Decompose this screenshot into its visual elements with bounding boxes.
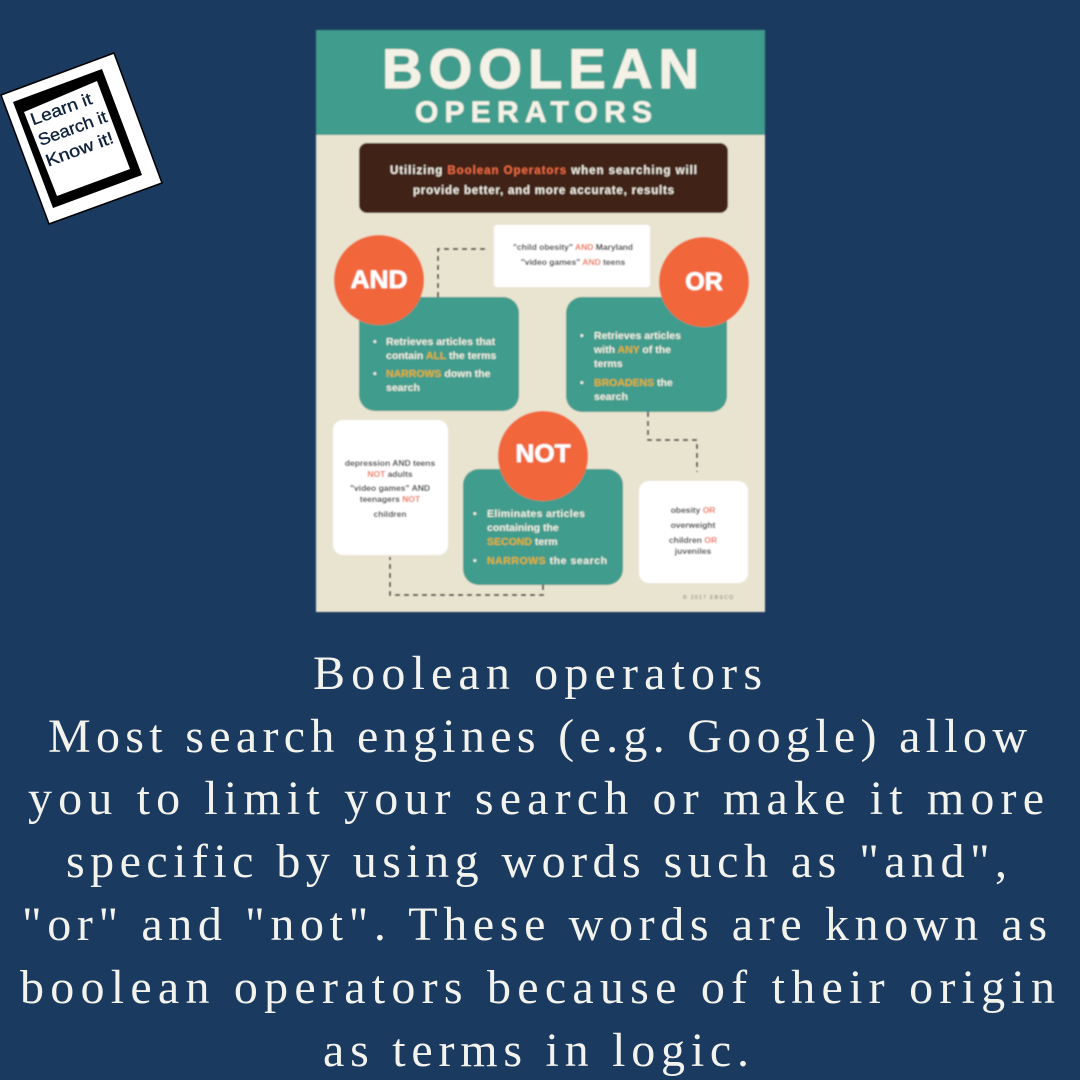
intro banner <box>359 143 728 213</box>
OR example box: juveniles <box>674 546 711 556</box>
body text <box>20 647 1055 1077</box>
copyright note: © 2017 EBSCO <box>683 594 733 601</box>
NOT panel: • <box>473 508 477 520</box>
body text: specific by using words such as "and", <box>66 835 1007 888</box>
poster header: BOOLEAN <box>382 37 699 100</box>
AND example box: "video games" AND teens <box>521 257 626 267</box>
connector: OR to example <box>648 412 697 472</box>
NOT example box: teenagers NOT <box>360 494 421 504</box>
AND panel: Retrieves articles that <box>386 336 496 348</box>
connector: AND to example <box>438 249 489 297</box>
AND panel: • <box>373 336 377 348</box>
AND badge <box>334 235 424 325</box>
OR panel <box>566 297 727 412</box>
NOT badge: NOT <box>516 440 570 468</box>
OR panel: BROADENS the <box>594 377 673 389</box>
AND example box: "child obesity" AND Maryland <box>513 242 633 252</box>
logo: Learn it, Search it, Know it <box>1 53 162 224</box>
OR panel: with ANY of the <box>593 344 671 356</box>
poster header: OPERATORS <box>415 96 652 129</box>
body text: Most search engines (e.g. Google) allow <box>48 710 1027 763</box>
OR badge: OR <box>685 268 723 296</box>
AND panel <box>359 297 519 411</box>
logo: Learn it, Search it, Know it: Learn it <box>28 89 95 129</box>
body text: boolean operators because of their origin <box>20 961 1055 1014</box>
AND panel: contain ALL the terms <box>386 350 496 362</box>
NOT panel <box>463 469 623 585</box>
poster header <box>316 30 765 135</box>
poster: Boolean operators <box>316 30 765 612</box>
AND example box <box>494 225 650 287</box>
OR example box: children OR <box>669 535 717 545</box>
AND panel: • <box>373 368 377 380</box>
NOT panel: NARROWS the search <box>487 555 607 567</box>
AND panel: search <box>386 382 420 394</box>
OR panel: terms <box>594 358 623 370</box>
logo: Learn it, Search it, Know it: Know it! <box>43 128 116 170</box>
NOT example box: NOT adults <box>367 469 413 479</box>
NOT example box: children <box>373 509 407 519</box>
NOT panel: SECOND term <box>487 536 558 548</box>
intro banner: provide better, and more accurate, results <box>413 185 674 197</box>
OR example box <box>639 481 748 583</box>
OR panel: search <box>594 391 628 403</box>
NOT panel: • <box>473 555 477 567</box>
OR panel: • <box>580 330 584 342</box>
NOT panel: Eliminates articles <box>487 508 585 520</box>
body text: Boolean operators <box>313 647 762 700</box>
intro banner: Utilizing Boolean Operators when searching will <box>390 165 697 177</box>
NOT example box: depression AND teens <box>345 458 435 468</box>
body text: "or" and "not". These words are known as <box>22 898 1047 951</box>
body text: you to limit your search or make it more <box>28 772 1044 825</box>
OR example box: obesity OR <box>671 505 715 515</box>
connector: NOT to example <box>390 557 543 595</box>
NOT badge <box>498 411 588 501</box>
NOT panel: containing the <box>487 522 559 534</box>
OR panel: Retrieves articles <box>594 330 681 342</box>
logo: Learn it, Search it, Know it: Search it <box>35 107 110 150</box>
OR panel: • <box>580 377 584 389</box>
NOT example box <box>333 420 448 555</box>
body text: as terms in logic. <box>323 1024 749 1077</box>
AND panel: NARROWS down the <box>386 368 491 380</box>
AND badge: AND <box>350 266 408 294</box>
OR example box: overweight <box>671 520 716 530</box>
OR badge <box>659 237 749 327</box>
NOT example box: "video games" AND <box>350 483 430 493</box>
